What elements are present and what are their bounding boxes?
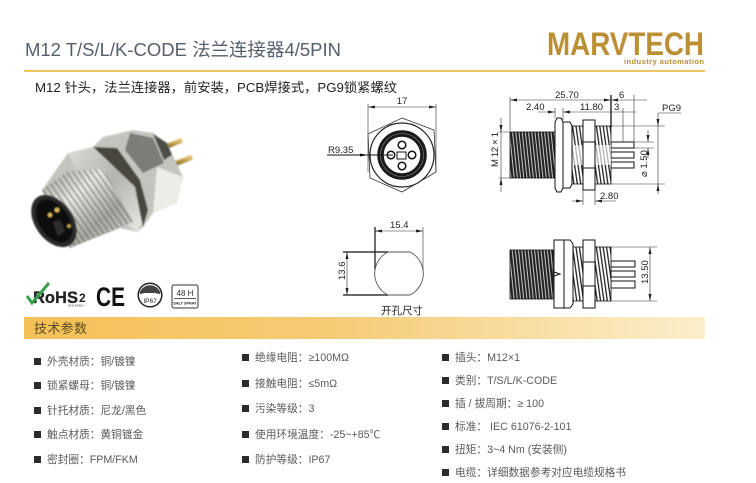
certification: IP67: IP67 — [143, 298, 157, 305]
drawing: side view with dimensions — [490, 90, 681, 205]
spec list: column 3: 插头：M12×1 — [455, 351, 520, 364]
header divider — [24, 70, 705, 72]
solder pins — [163, 140, 192, 165]
section heading bar — [24, 317, 705, 339]
spec list: column 3: 标准： IEC 61076-2-101 — [455, 420, 571, 433]
drawing: front view: R9.35 — [328, 145, 353, 156]
dark lock ring — [93, 147, 148, 227]
side view dimensions: 11.80 — [580, 102, 603, 113]
spec list: column 3: 类别：T/S/L/K-CODE — [455, 374, 557, 387]
drawing: panel cutout — [337, 220, 423, 317]
side view dimensions: PG9 — [662, 103, 681, 114]
spec list: column 2 — [242, 351, 381, 466]
section heading bar: 技术参数 — [34, 321, 87, 336]
spec list: column 1: 针托材质：尼龙/黑色 — [47, 404, 146, 417]
certification: IP67 — [138, 283, 162, 307]
connector face — [22, 186, 86, 256]
drawing: front view — [327, 96, 436, 192]
side view dimensions: 2.80 — [600, 191, 618, 202]
contact pins and key — [48, 208, 71, 236]
drawing: lower side view — [510, 240, 657, 308]
product photo: connector — [22, 130, 192, 256]
spec list: column 2: 污染等级：3 — [255, 402, 314, 415]
side view body — [510, 118, 634, 192]
spec list: column 3: 插 / 拔周期：≥ 100 — [455, 397, 544, 410]
subtitle: M12 针头，法兰连接器，前安装，PCB焊接式，PG9锁紧螺纹 — [35, 80, 397, 95]
rear hex body — [125, 133, 183, 213]
certification: 48H salt spray — [172, 285, 198, 308]
certification: RoHS2 — [27, 283, 86, 308]
spec list: column 1: 外壳材质：铜/镀镍 — [47, 355, 136, 368]
side view dimensions: 25.70 — [555, 90, 579, 101]
drawing: panel cutout: 13.6 — [337, 262, 348, 280]
title: M12 T/S/L/K-CODE 法兰连接器4/5PIN — [25, 40, 341, 60]
spec list: column 3: 电缆：详细数据参考对应电缆规格书 — [455, 466, 626, 479]
drawing: lower side view: 13.50 — [640, 260, 651, 284]
drawing: front view: 17 — [397, 96, 407, 107]
certification: CE: CE — [96, 282, 125, 312]
spec list: column 3 — [442, 351, 626, 479]
certification: 48H salt spray: SALT SPRAY — [173, 302, 197, 306]
side view dimensions — [490, 90, 681, 205]
side view dimensions: 3 — [614, 102, 619, 113]
certification: RoHS2: 2011/65/EU — [68, 304, 84, 308]
spec list: column 3: 扭矩：3~4 Nm (安装侧) — [455, 443, 567, 456]
logo: MARVTECH: MARVTECH — [547, 26, 704, 62]
drawing: panel cutout: 开孔尺寸 — [381, 304, 423, 317]
side view dimensions: 6 — [619, 90, 624, 101]
spec list: column 1: 密封圈：FPM/FKM — [47, 453, 138, 466]
certification: RoHS2: 2 — [79, 291, 86, 305]
body silhouette — [42, 130, 183, 248]
spec list: column 1: 锁紧螺母：铜/镀镍 — [47, 379, 136, 392]
spec list: column 2: 接触电阻：≤5mΩ — [255, 377, 337, 390]
drawing: panel cutout: 15.4 — [390, 220, 408, 231]
spec list: column 2: 绝缘电阻：≥100MΩ — [255, 351, 349, 364]
side view dimensions: M 12 × 1 — [490, 132, 501, 167]
logo: MARVTECH: industry automation — [624, 57, 704, 66]
spec list: column 2: 防护等级：IP67 — [255, 453, 330, 466]
spec list: column 1 — [34, 355, 146, 466]
side view dimensions: 2.40 — [526, 102, 544, 113]
certification: RoHS2: RoHS — [33, 288, 78, 307]
side view dimensions: ⌀ 1.50 — [639, 150, 650, 177]
flange — [68, 147, 142, 232]
certification: 48H salt spray: 48 H — [177, 289, 194, 298]
threaded barrel — [42, 168, 133, 248]
spec list: column 1: 触点材质：黄铜镀金 — [47, 428, 144, 441]
spec list: column 2: 使用环境温度：-25~+85℃ — [255, 428, 381, 441]
